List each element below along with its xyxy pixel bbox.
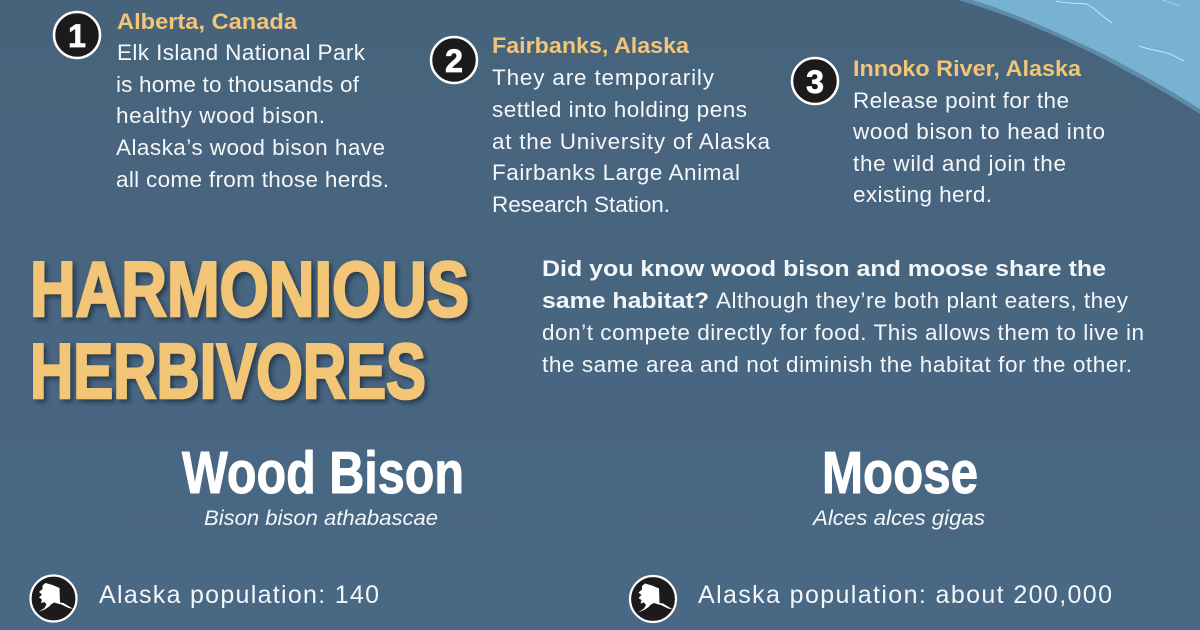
- stop 1: Alberta: [54, 9, 389, 192]
- did you know text block: same habitat?: [542, 288, 709, 313]
- stop 1 text: Elk Island National Park: [117, 40, 366, 65]
- wood bison heading: [182, 440, 464, 530]
- stop 2 text: Fairbanks, Alaska: [492, 33, 690, 58]
- icon: Alaska map, moose: [630, 576, 676, 622]
- moose latin name: Alces alces gigas: [811, 507, 986, 530]
- moose heading: [811, 440, 986, 530]
- stop 1 text: all come from those herds.: [116, 167, 389, 192]
- title: HERBIVORES: [30, 327, 426, 415]
- water corner: [958, 0, 1200, 114]
- stop 2 text: settled into holding pens: [492, 97, 747, 122]
- stop 2 text: Research Station.: [492, 192, 670, 217]
- number badge 1: [54, 12, 100, 58]
- did you know text block: Did you know wood bison and moose share the: [542, 256, 1106, 281]
- moose heading: Moose: [822, 440, 978, 506]
- stop 3 text: Innoko River, Alaska: [853, 56, 1082, 81]
- number badge 2: [431, 37, 477, 83]
- stop 1 text: [116, 9, 389, 192]
- stop 3 text: existing herd.: [853, 182, 992, 207]
- title: HARMONIOUS: [30, 245, 469, 333]
- bison population: Alaska population: 140: [99, 581, 379, 609]
- wood bison latin name: Bison bison athabascae: [204, 507, 438, 530]
- stop 2 text: Fairbanks Large Animal: [492, 160, 740, 185]
- title: [30, 245, 469, 415]
- stop 3: Innoko River: [792, 56, 1105, 207]
- number badge 3: 3: [806, 64, 824, 100]
- stop 2: Fairbanks: [431, 33, 770, 217]
- stop 1 text: healthy wood bison.: [116, 103, 325, 128]
- stop 3 text: wood bison to head into: [852, 119, 1105, 144]
- did you know text block: don’t compete directly for food. This allows them to live in: [542, 320, 1144, 345]
- stop 2 text: [492, 33, 770, 217]
- stop 3 text: Release point for the: [853, 88, 1069, 113]
- number badge 2: 2: [445, 43, 463, 79]
- stop 3 text: the wild and join the: [853, 151, 1066, 176]
- number badge 3: [792, 58, 838, 104]
- stop 1 text: is home to thousands of: [116, 72, 360, 97]
- stop 3 text: [852, 56, 1105, 207]
- stop 1 text: Alberta, Canada: [117, 9, 298, 34]
- did you know text block: Although they’re both plant eaters, they: [716, 288, 1129, 313]
- moose population: Alaska population: about 200,000: [698, 581, 1112, 609]
- stop 2 text: They are temporarily: [492, 65, 715, 90]
- did you know text block: the same area and not diminish the habitat for the other.: [542, 352, 1132, 377]
- stop 1 text: Alaska’s wood bison have: [116, 135, 385, 160]
- wood bison heading: Wood Bison: [182, 440, 464, 506]
- stop 2 text: at the University of Alaska: [492, 129, 770, 154]
- did you know text block: [542, 256, 1144, 377]
- icon: Alaska map, bison: [30, 576, 76, 622]
- number badge 1: 1: [68, 18, 86, 54]
